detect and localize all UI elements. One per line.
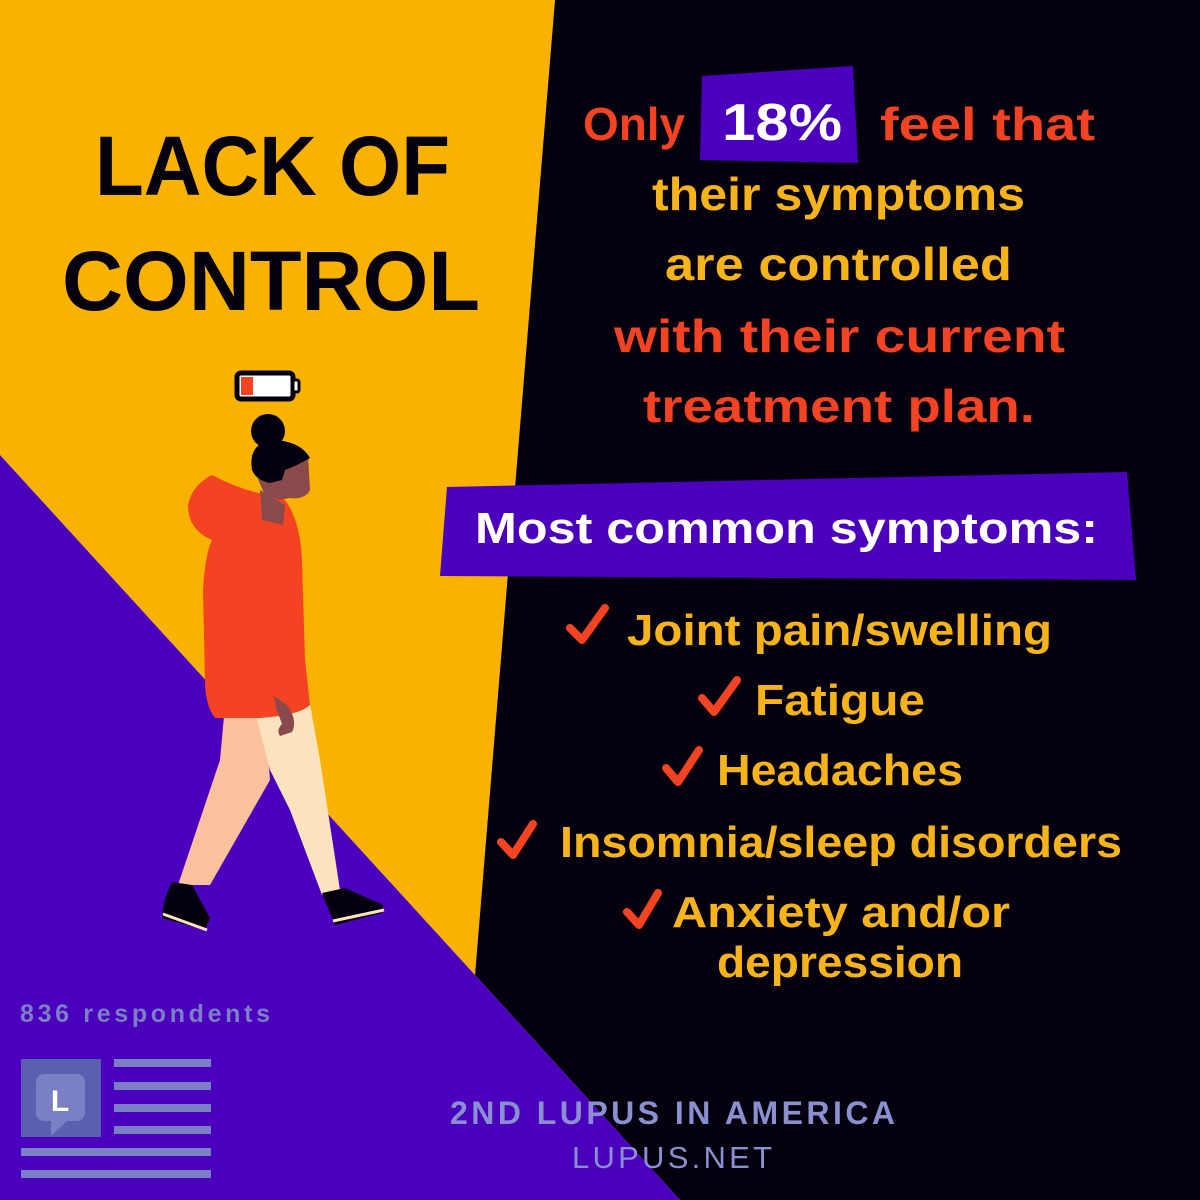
symptoms checklist: Insomnia/sleep disorders (560, 818, 1122, 867)
footer source (450, 1095, 895, 1175)
headline statistic (583, 94, 1095, 432)
title (62, 119, 480, 328)
logo (21, 1059, 211, 1178)
title: CONTROL (62, 234, 480, 328)
title: LACK OF (95, 119, 450, 213)
symptoms checklist (501, 606, 1122, 987)
symptoms checklist: Joint pain/swelling (627, 606, 1052, 655)
symptoms checklist: Fatigue (755, 676, 925, 725)
icon: low battery (237, 373, 299, 399)
headline statistic: treatment plan. (643, 380, 1035, 432)
banner: most common symptoms: Most common symptoms: (475, 504, 1098, 553)
headline statistic: 18% (722, 94, 842, 152)
symptoms checklist: Headaches (717, 746, 963, 795)
headline statistic: feel that (880, 98, 1095, 150)
symptoms checklist: Anxiety and/or (672, 888, 1010, 937)
headline statistic: are controlled (665, 238, 1012, 290)
banner: most common symptoms (440, 472, 1136, 580)
logo: L (51, 1085, 69, 1118)
footer source: 2ND LUPUS IN AMERICA (450, 1095, 895, 1131)
headline statistic: Only (583, 98, 685, 150)
symptoms checklist: depression (717, 938, 963, 987)
footer source: LUPUS.NET (572, 1140, 772, 1175)
18% highlight box (700, 66, 858, 163)
respondents count: 836 respondents (20, 1000, 270, 1028)
person walking (162, 414, 384, 930)
headline statistic: with their current (613, 310, 1065, 362)
headline statistic: their symptoms (652, 168, 1025, 220)
